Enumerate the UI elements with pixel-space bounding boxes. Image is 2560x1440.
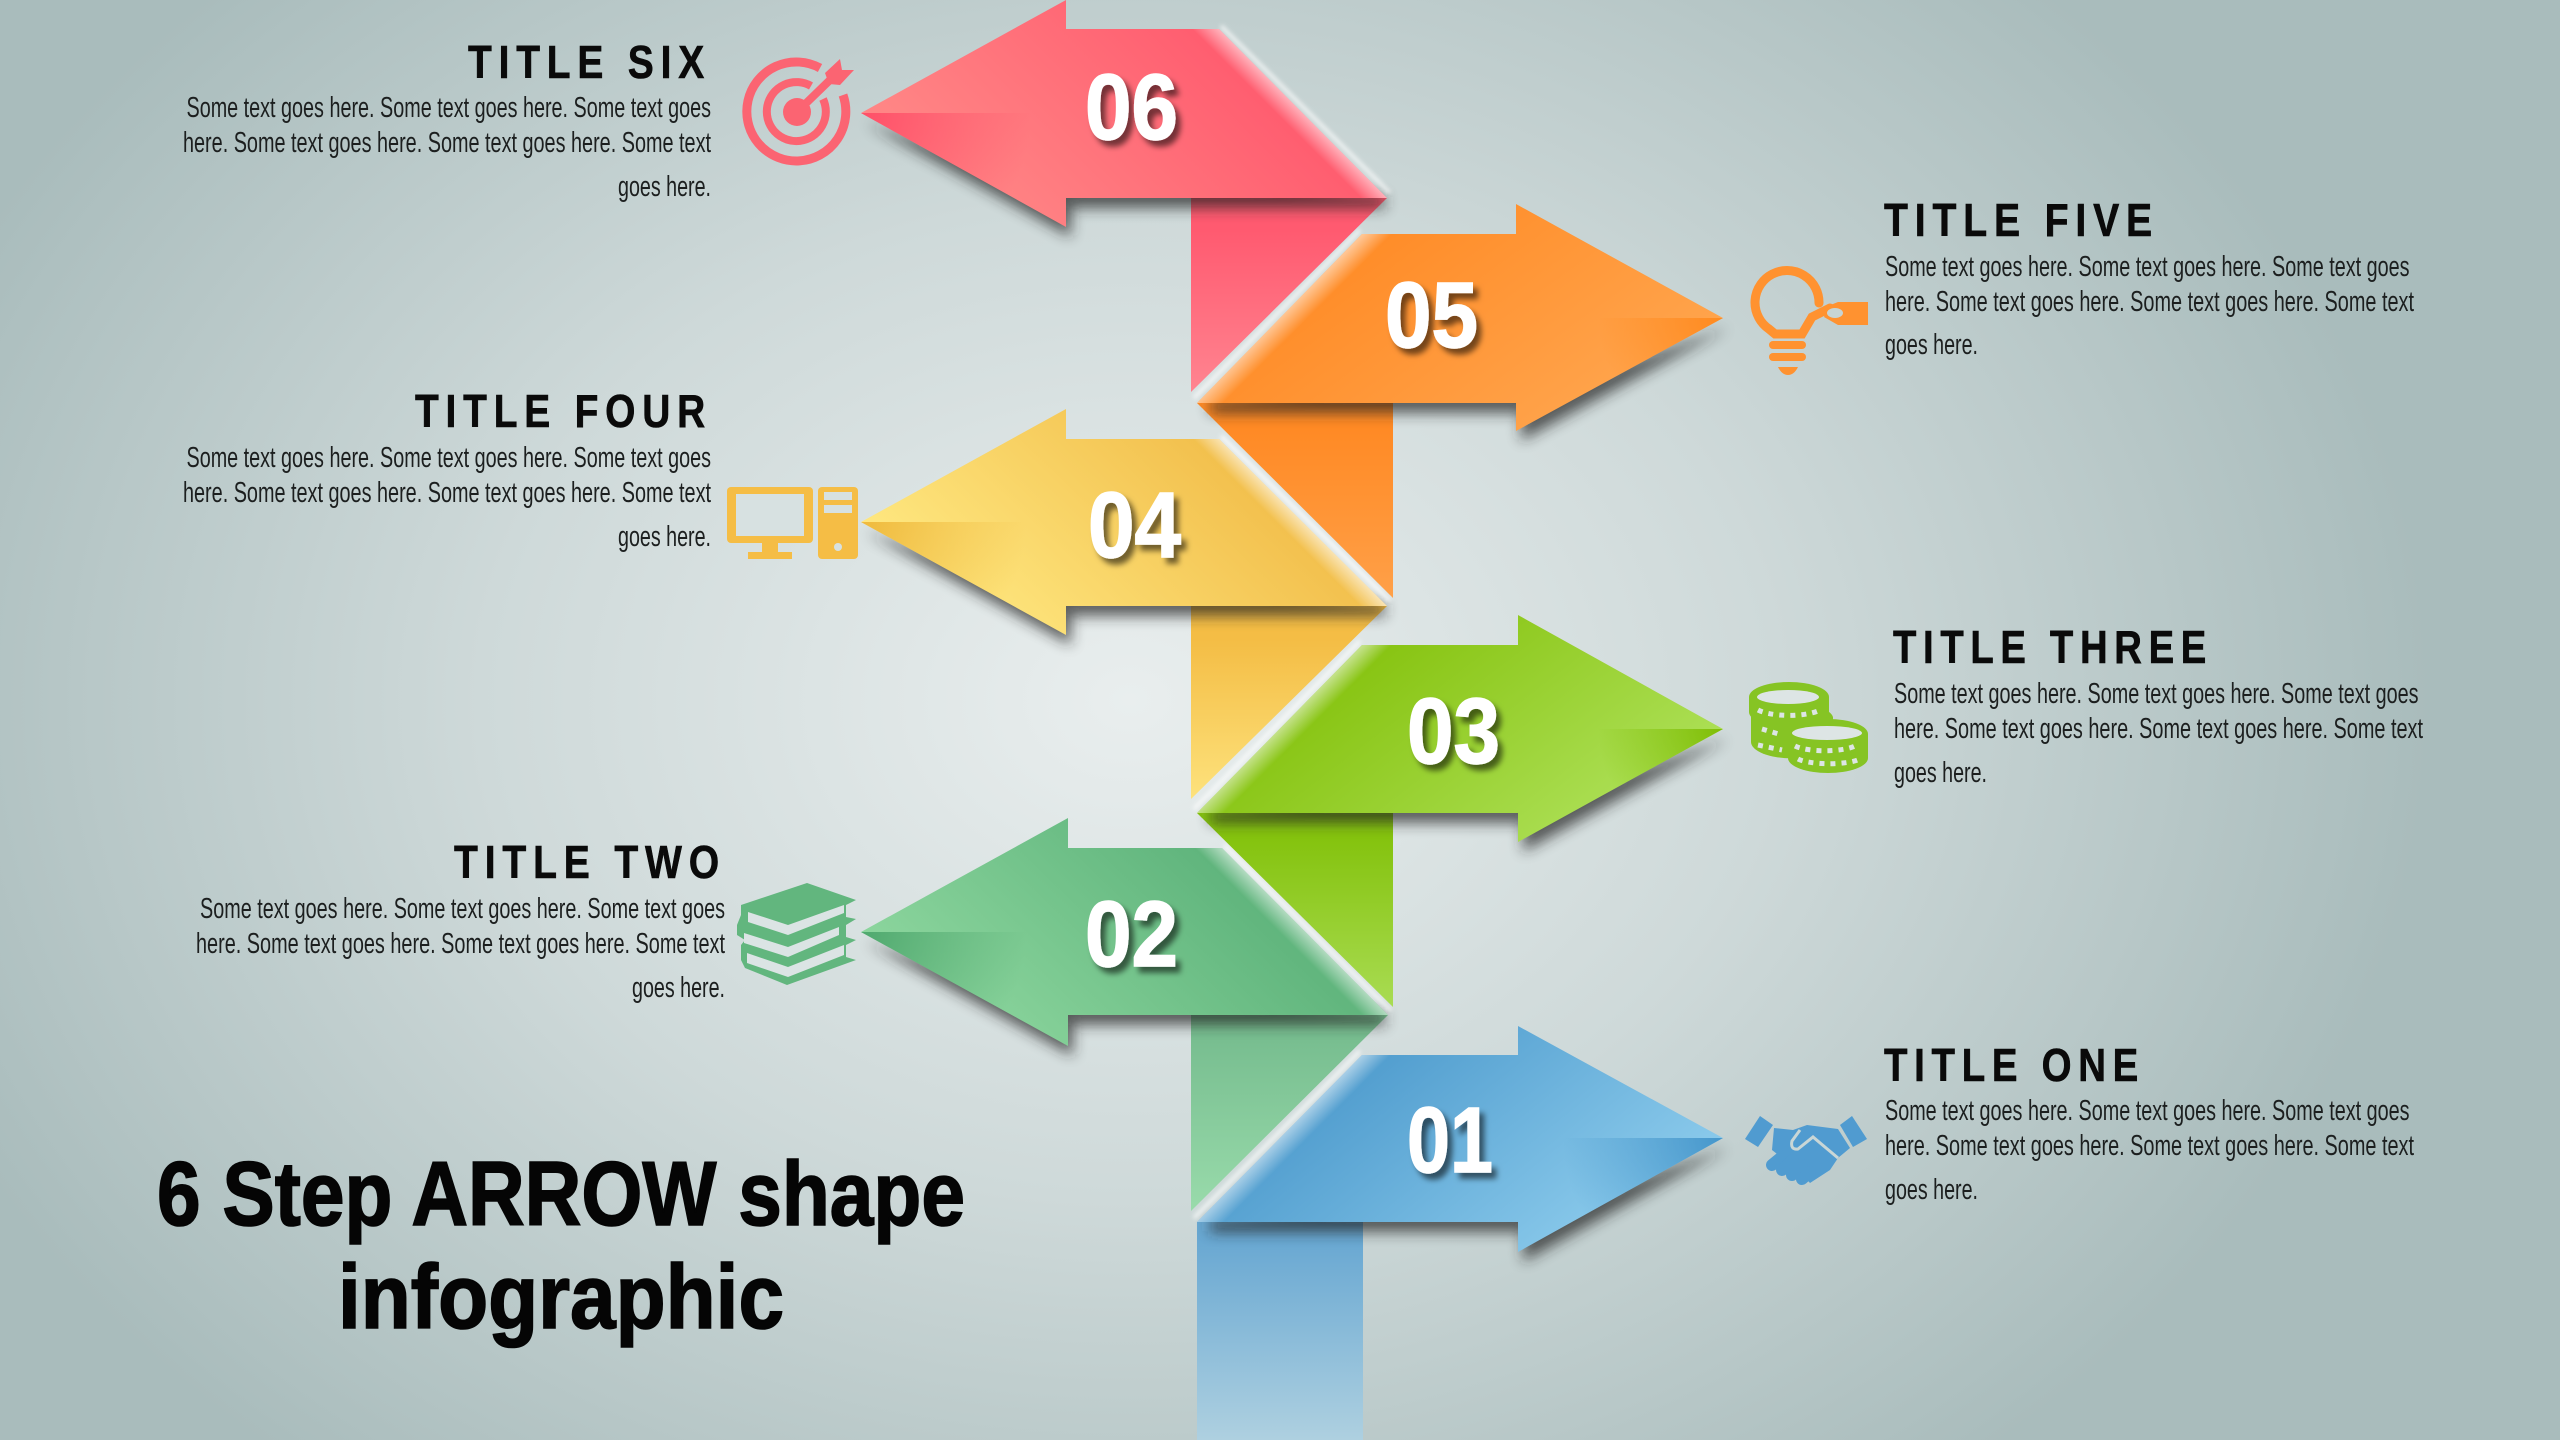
body text: Some text goes here. Some text goes here. Some text goes — [200, 893, 725, 925]
body text: goes here. — [618, 171, 711, 203]
number 04: 04 — [1088, 473, 1181, 577]
body text: goes here. — [632, 972, 725, 1004]
arrow 05 orange — [1194, 204, 1728, 598]
main title — [157, 1144, 965, 1348]
arrow 06 red — [861, 0, 1390, 392]
stem of arrow 06 — [1191, 198, 1387, 392]
text block: title six — [183, 36, 711, 203]
icon: books — [737, 883, 856, 985]
body text: goes here. — [618, 521, 711, 553]
number 06: 06 — [1085, 55, 1178, 159]
number 01: 01 — [1407, 1088, 1493, 1192]
main title: 6 Step ARROW shape — [157, 1144, 965, 1245]
body text — [183, 442, 711, 553]
icon: target — [747, 59, 854, 161]
body text: goes here. — [1885, 329, 1978, 361]
heading: TITLE ONE — [1884, 1039, 2145, 1091]
stem of arrow 05 — [1197, 403, 1393, 598]
arrow 04 yellow — [861, 409, 1390, 799]
heading: TITLE TWO — [454, 836, 726, 888]
body text: Some text goes here. Some text goes here. Some text goes — [186, 442, 711, 474]
stem of arrow 02 — [1191, 1015, 1388, 1211]
arrow 02 green — [861, 818, 1391, 1211]
icon: coins — [1749, 682, 1868, 773]
arrow 03 lime — [1194, 615, 1728, 1007]
body text — [1885, 251, 2414, 361]
arrow 01 blue — [1194, 1026, 1728, 1440]
body text: Some text goes here. Some text goes here. Some text goes — [186, 92, 711, 124]
number 05: 05 — [1385, 263, 1478, 367]
body text: goes here. — [1885, 1174, 1978, 1206]
text block: title three — [1893, 621, 2423, 789]
body text — [196, 893, 725, 1004]
heading: TITLE SIX — [468, 36, 711, 88]
icon: computer — [727, 487, 858, 559]
number 03: 03 — [1407, 679, 1500, 783]
body text — [183, 92, 711, 203]
body text — [1885, 1095, 2414, 1206]
stem of arrow 01 — [1197, 1222, 1363, 1440]
text block: title four — [183, 385, 712, 553]
heading: TITLE FOUR — [415, 385, 712, 437]
icon: light bulb — [1755, 271, 1868, 375]
number 02: 02 — [1085, 882, 1178, 986]
stem of arrow 03 — [1197, 813, 1393, 1007]
text block: title one — [1884, 1039, 2414, 1206]
body text: here. Some text goes here. Some text goes here. Some text — [183, 477, 711, 509]
body text: here. Some text goes here. Some text goes here. Some text — [196, 928, 725, 960]
stem of arrow 04 — [1191, 606, 1387, 799]
main title: infographic — [338, 1247, 784, 1348]
body text: here. Some text goes here. Some text goes here. Some text — [183, 127, 711, 159]
text block: title five — [1884, 194, 2414, 361]
heading: TITLE THREE — [1893, 621, 2213, 673]
body text: goes here. — [1894, 757, 1987, 789]
heading: TITLE FIVE — [1884, 194, 2159, 246]
body text — [1894, 678, 2423, 789]
icon: handshake — [1745, 1116, 1867, 1183]
text block: title two — [196, 836, 726, 1004]
